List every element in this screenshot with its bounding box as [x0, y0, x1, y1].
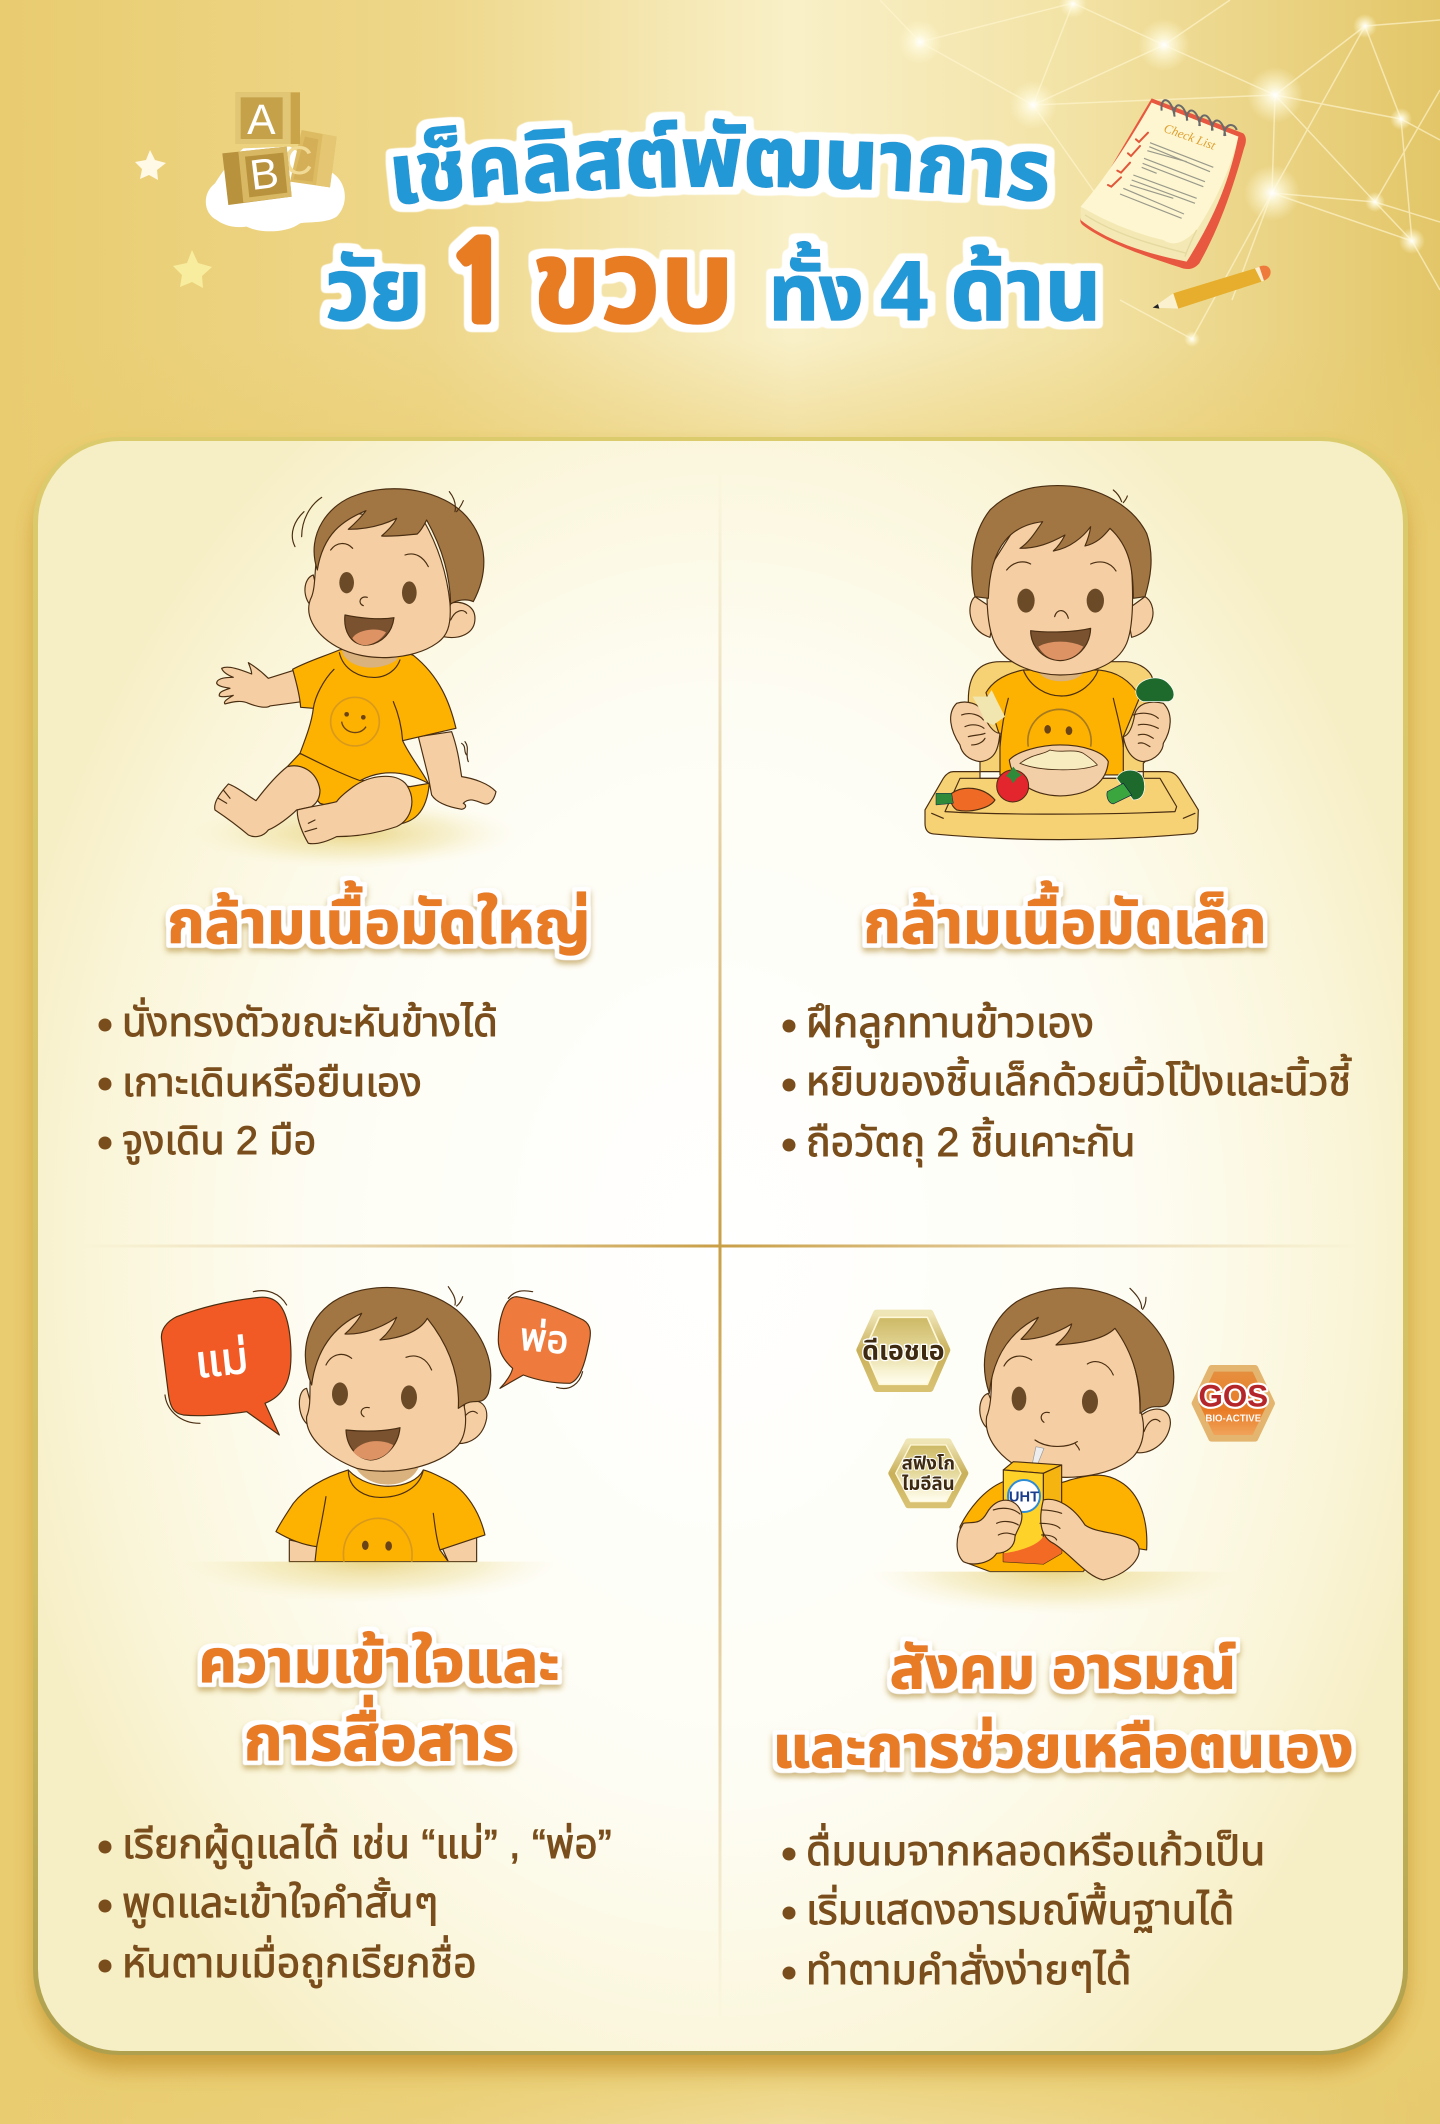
tray: [925, 772, 1198, 840]
hands: [957, 1500, 1022, 1564]
arm left: [217, 663, 302, 707]
badge: sphingomyelin: [892, 1442, 965, 1505]
heading: ความเข้าใจและ: [198, 1628, 560, 1695]
list: เรียกผู้ดูแลได้ เช่น “แม่” , “พ่อ”: [122, 1821, 612, 1869]
heading: สังคม อารมณ์: [890, 1635, 1236, 1701]
list: จูงเดิน 2 มือ: [122, 1119, 316, 1164]
list: [98, 1821, 612, 1988]
head: [299, 1388, 312, 1425]
shirt: [960, 1475, 1147, 1572]
heading: กล้ามเนื้อมัดใหญ่: [167, 880, 591, 956]
title: ด้าน: [951, 240, 1101, 339]
panel: language: [98, 1287, 612, 1988]
legs: [215, 766, 320, 837]
bowl: [1009, 745, 1108, 796]
list: เริ่มแสดงอารมณ์พื้นฐานได้: [806, 1882, 1234, 1933]
icon: alphabet blocks on cloud: B: [247, 149, 281, 200]
badge: sphingomyelin: สฟิงโก: [902, 1452, 955, 1473]
title: ขวบ: [532, 217, 734, 347]
food: tomato: [997, 770, 1029, 802]
title: [319, 110, 1142, 347]
list: พูดและเข้าใจคำสั้นๆ: [122, 1877, 438, 1928]
panel: social emotional: [773, 1288, 1353, 1993]
face: [309, 513, 450, 658]
list: [782, 1823, 1265, 1993]
heading: [773, 1635, 1353, 1780]
arm right: [418, 732, 496, 809]
badge: GOS: [1195, 1368, 1272, 1438]
title: 4: [881, 244, 928, 338]
title: วัย: [325, 243, 423, 339]
icon: pencil: [1153, 266, 1271, 309]
milk carton: [1003, 1447, 1062, 1564]
title: เช็คลิสต์พัฒนาการ: [385, 110, 1056, 212]
title: 1: [446, 230, 512, 337]
list: ฝึกลูกทานข้าวเอง: [806, 999, 1094, 1048]
list: หยิบของชิ้นเล็กด้วยนิ้วโป้งและนิ้วชี้: [806, 1054, 1352, 1104]
shorts: [287, 753, 429, 825]
list: [782, 999, 1352, 1167]
food: cracker: [973, 690, 1005, 725]
icon: pale star: [173, 250, 212, 288]
heading: และการช่วยเหลือตนเอง: [773, 1715, 1353, 1780]
list: ทำตามคำสั่งง่ายๆได้: [806, 1944, 1131, 1993]
illustration: baby eating: [925, 486, 1198, 840]
icon: checklist notebook: [1080, 98, 1246, 269]
icon: white star: [135, 150, 166, 180]
badge: DHA: [860, 1313, 947, 1388]
speech bubble: mother: [161, 1291, 291, 1435]
head: [970, 597, 995, 637]
food: broccoli 2: [1117, 770, 1145, 800]
list: ดื่มนมจากหลอดหรือแก้วเป็น: [806, 1823, 1265, 1874]
badge: GOS: GOS: [1198, 1379, 1268, 1414]
list: ถือวัตถุ 2 ชิ้นเคาะกัน: [806, 1117, 1136, 1167]
arms and shirt: [289, 1537, 477, 1562]
heading: กล้ามเนื้อมัดเล็ก: [863, 880, 1267, 956]
illustration: sitting baby: [190, 489, 517, 868]
panel: main card: [33, 437, 1408, 2069]
illustration: baby talking: [161, 1287, 590, 1603]
icon: checklist notebook: Check List: [1162, 121, 1218, 153]
shirt: [293, 643, 456, 783]
panel: fine motor: [782, 486, 1352, 1167]
list: [98, 997, 498, 1164]
head: [980, 1393, 995, 1430]
heading: การสื่อสาร: [244, 1695, 514, 1774]
icon: alphabet blocks on cloud: A: [247, 96, 276, 144]
speech bubble: father: [498, 1291, 590, 1388]
food: carrot: [951, 788, 995, 811]
badge: DHA: ดีเอชเอ: [862, 1335, 945, 1365]
badge: GOS: BIO-ACTIVE: [1205, 1413, 1262, 1424]
list: หันตามเมื่อถูกเรียกชื่อ: [122, 1935, 477, 1988]
speech bubble: mother: แม่: [193, 1331, 251, 1388]
list: นั่งทรงตัวขณะหันข้างได้: [122, 997, 498, 1045]
food: broccoli: [1136, 678, 1174, 702]
network decoration: [880, 0, 1440, 347]
badge: sphingomyelin: ไมอีลิน: [902, 1473, 955, 1494]
milk carton: UHT: [1009, 1490, 1039, 1506]
icon: alphabet blocks on cloud: [206, 92, 345, 231]
illustration: baby drinking milk: [860, 1288, 1272, 1615]
heading: [198, 1628, 560, 1774]
speech bubble: father: พ่อ: [518, 1316, 570, 1363]
list: เกาะเดินหรือยืนเอง: [122, 1059, 422, 1105]
icon: alphabet blocks on cloud: C: [284, 139, 313, 183]
title: ทั้ง: [769, 242, 863, 337]
panel: gross motor: [98, 489, 591, 1164]
